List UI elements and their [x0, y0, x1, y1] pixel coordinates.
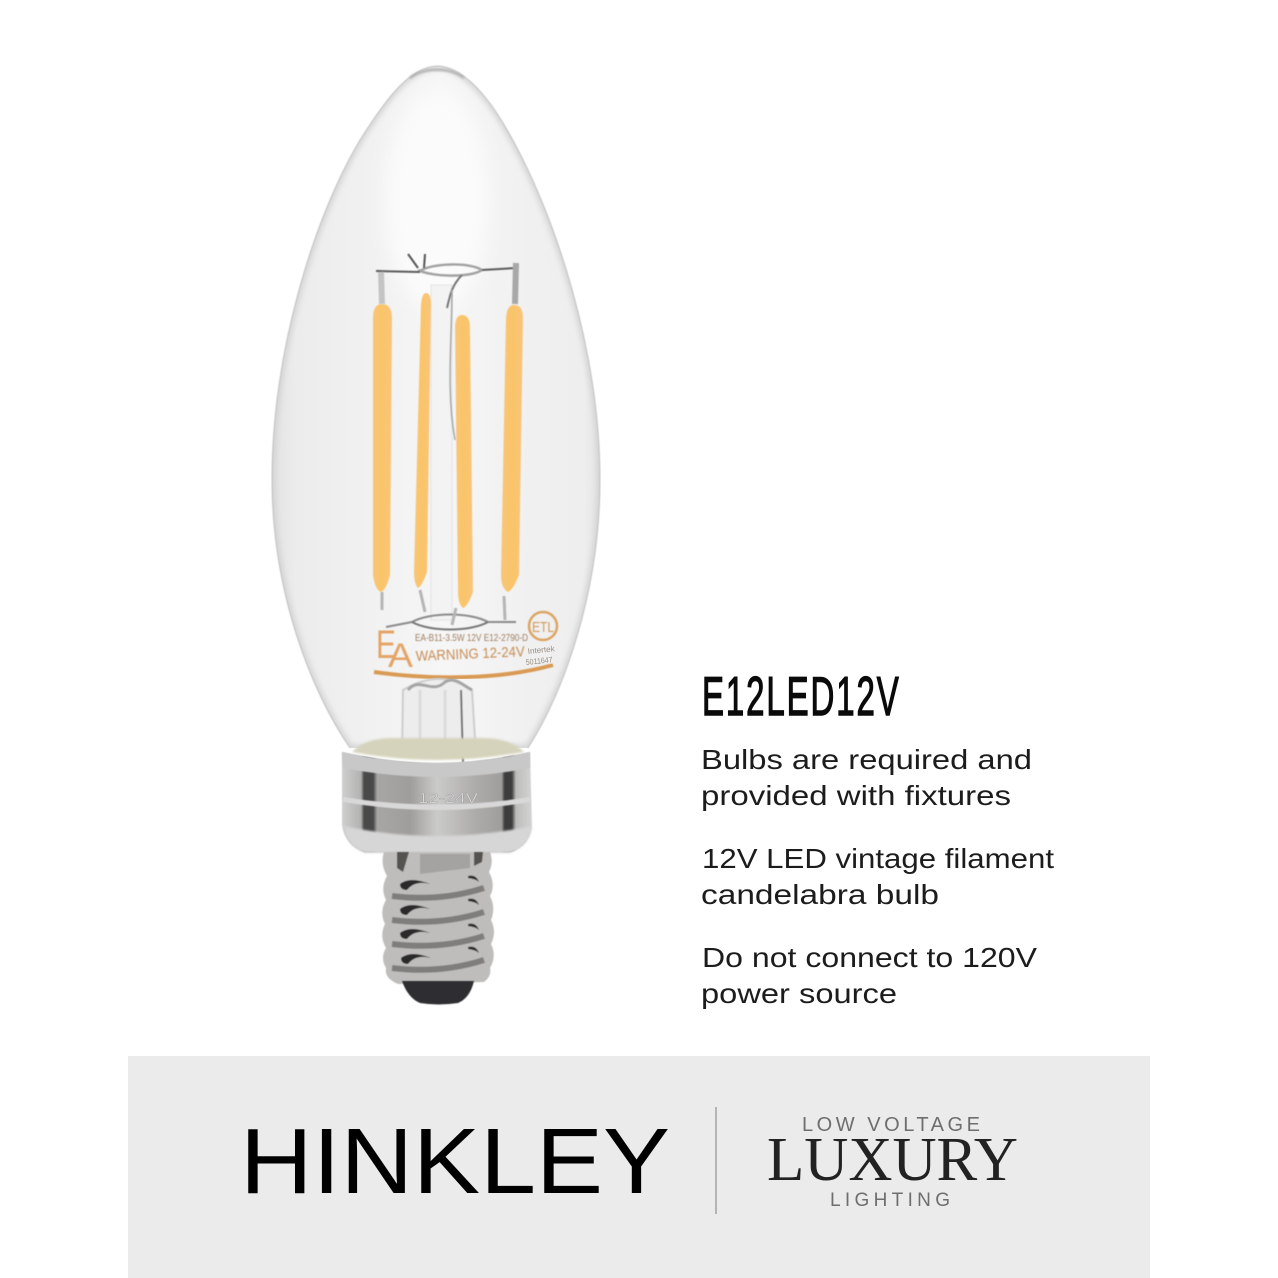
product heading: E12LED12V — [702, 665, 899, 727]
bulb print: ETL mark: ETL — [532, 619, 554, 636]
bulb print: Intertek number: 5011647 — [525, 655, 554, 667]
filament: second — [414, 293, 431, 588]
note: bulbs required: Bulbs are required and — [701, 744, 1032, 775]
glass envelope — [272, 66, 600, 748]
screw thread — [382, 852, 494, 984]
bulb print: Intertek: Intertek — [527, 644, 556, 656]
note: bulb type: 12V LED vintage filament — [702, 843, 1054, 874]
metal collar — [342, 752, 532, 852]
infographic canvas — [128, 65, 1150, 1278]
Low Voltage Luxury Lighting logo: LIGHTING — [830, 1190, 950, 1211]
lower filament support wires — [382, 590, 516, 630]
bulb print: EA logo: E — [376, 623, 396, 667]
bulb print: orange swoosh — [374, 665, 553, 677]
note: voltage warning: power source — [701, 978, 897, 1009]
glass pinch seal — [402, 679, 476, 762]
Low Voltage Luxury Lighting logo: LOW VOLTAGE — [802, 1114, 980, 1136]
filament: first — [373, 304, 392, 592]
product photo: candelabra LED bulb — [272, 66, 600, 1004]
note: bulb type — [701, 843, 1054, 910]
bulb print: EA logo — [376, 623, 413, 675]
base emboss text: 12-24V — [418, 790, 478, 807]
collar rim — [342, 752, 530, 777]
glass tip reflection — [410, 70, 464, 78]
note: bulbs required: provided with fixtures — [701, 780, 1011, 811]
Low Voltage Luxury Lighting logo — [767, 1114, 1018, 1211]
bulb print: ETL mark — [529, 612, 557, 640]
vertical divider — [715, 1107, 717, 1214]
neck shading — [397, 852, 483, 872]
bulb print: model number: EA-B11-3.5W 12V E12-2790-D — [415, 633, 528, 644]
glass inner edge shading — [272, 66, 600, 748]
footer brand panel — [128, 1056, 1150, 1278]
glass support stem — [431, 285, 452, 620]
black contact tip — [402, 981, 474, 1004]
dark thread crescents — [400, 876, 479, 964]
glass rim line — [272, 66, 600, 748]
Low Voltage Luxury Lighting logo: LUXURY — [767, 1126, 1018, 1194]
bulb print: EA logo: A — [388, 637, 413, 675]
collar band — [343, 797, 530, 810]
thread silhouette — [382, 852, 494, 984]
note: bulb type: candelabra bulb — [701, 879, 939, 910]
filaments group — [373, 293, 523, 608]
bulb print: warning: WARNING 12-24V — [415, 643, 525, 665]
top filament support wires — [376, 254, 516, 440]
cement ring — [352, 738, 524, 760]
feature text block — [701, 744, 1054, 1009]
note: voltage warning — [701, 942, 1037, 1009]
brand logo: HINKLEY: HINKLEY — [240, 1109, 670, 1213]
collar base lip — [344, 826, 532, 853]
note: voltage warning: Do not connect to 120V — [702, 942, 1037, 973]
glass highlight — [385, 90, 489, 310]
filament: third — [455, 315, 473, 608]
note: bulbs required — [701, 744, 1032, 811]
filament: fourth — [501, 305, 523, 592]
mid grey thread bands — [392, 888, 484, 970]
